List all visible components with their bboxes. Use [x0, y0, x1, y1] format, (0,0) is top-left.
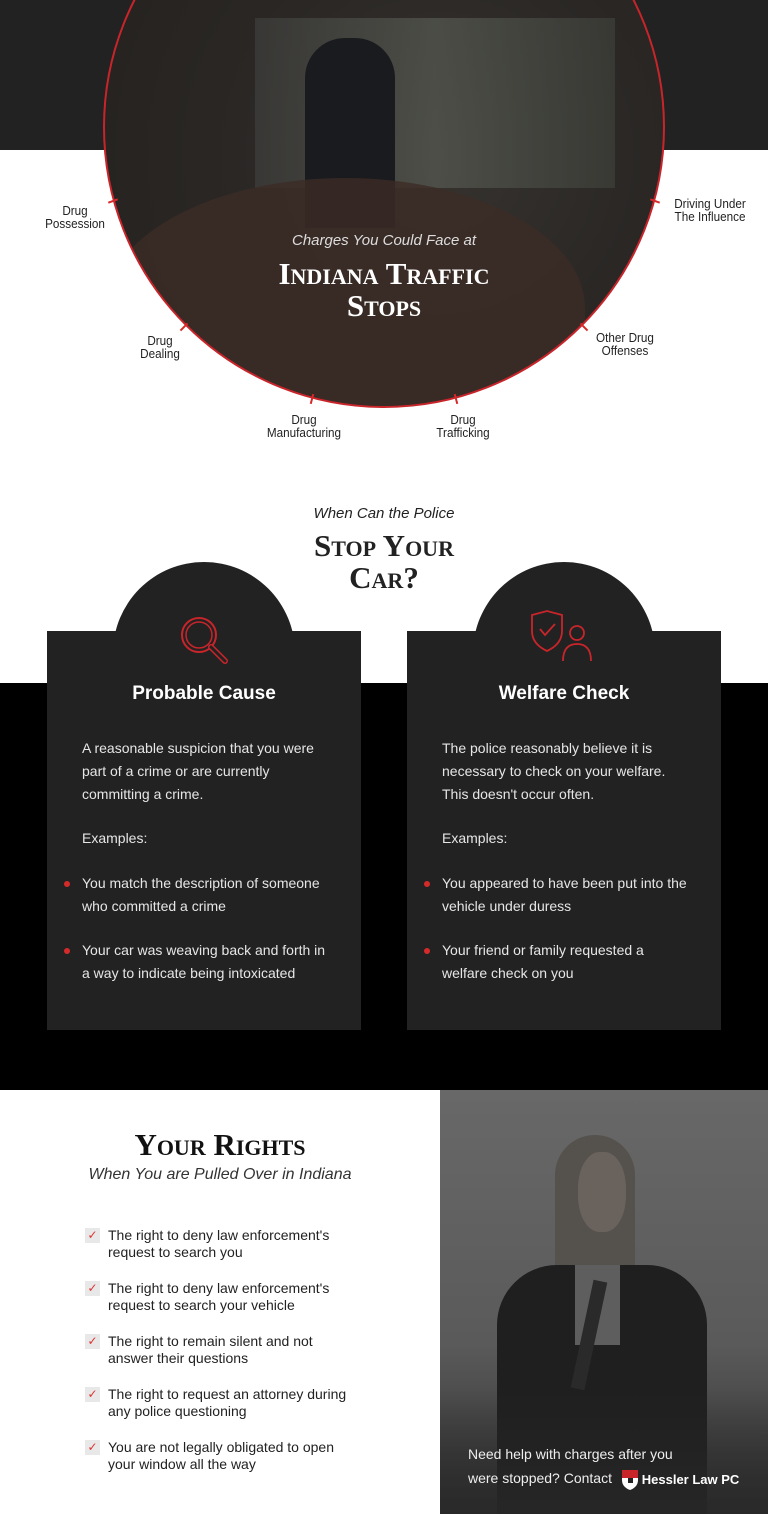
- hero title: Stops: [347, 288, 421, 323]
- card: welfare check: Examples:: [442, 830, 507, 846]
- rights list: ✓: [87, 1334, 98, 1348]
- charge labels: Driving Under: [674, 196, 746, 211]
- charge labels: Drug: [291, 412, 317, 427]
- logo: Hessler Law PC: [642, 1472, 739, 1487]
- section heading: when can police stop: [314, 505, 454, 595]
- attorney photo: [440, 1090, 768, 1514]
- rights list: The right to deny law enforcement's: [108, 1227, 329, 1243]
- card: welfare check: You appeared to have been put into the vehicle under duress: [442, 875, 687, 914]
- card: probable cause: A reasonable suspicion that you were part of a crime or are currently committing a crime.: [82, 740, 314, 802]
- rights heading: [88, 1127, 351, 1183]
- icon: shield person: [531, 610, 592, 661]
- section heading: when can police stop: Stop Your: [314, 528, 454, 563]
- card: probable cause: Examples:: [82, 830, 147, 846]
- logo: [622, 1470, 739, 1490]
- rights list: ✓: [87, 1387, 98, 1401]
- contact callout: Need help with charges after you: [468, 1446, 673, 1462]
- charge labels: Drug: [450, 412, 476, 427]
- icon: magnifier: [181, 617, 228, 664]
- rights list: request to search you: [108, 1244, 243, 1260]
- circle ticks: [108, 198, 660, 404]
- charge labels: Possession: [45, 216, 105, 231]
- section heading: when can police stop: Car?: [349, 560, 419, 595]
- hero title: [278, 232, 490, 323]
- charge labels: Trafficking: [436, 425, 490, 440]
- hero title: Charges You Could Face at: [292, 232, 476, 249]
- black band: [0, 683, 768, 1090]
- top dark band: [0, 0, 768, 150]
- charge labels: [45, 196, 746, 440]
- card: probable cause: Your car was weaving back and forth in a way to indicate being intoxicated: [82, 942, 325, 981]
- rights list: ✓: [87, 1228, 98, 1242]
- rights list: ✓: [87, 1281, 98, 1295]
- card: probable cause: You match the description of someone who committed a crime: [82, 875, 320, 914]
- card: welfare check: Your friend or family requested a welfare check on you: [442, 942, 644, 981]
- rights list: any police questioning: [108, 1403, 247, 1419]
- charge labels: Drug: [147, 333, 173, 348]
- charge labels: Dealing: [140, 346, 180, 361]
- rights list: You are not legally obligated to open: [108, 1439, 334, 1455]
- rights heading: Your Rights: [134, 1127, 306, 1162]
- rights list: request to search your vehicle: [108, 1297, 295, 1313]
- section heading: when can police stop: When Can the Police: [314, 505, 454, 522]
- rights list: ✓: [87, 1440, 98, 1454]
- contact callout: were stopped? Contact: [468, 1470, 612, 1486]
- rights heading: When You are Pulled Over in Indiana: [88, 1166, 351, 1183]
- card: welfare check: [407, 631, 721, 1030]
- hero title: Indiana Traffic: [278, 256, 490, 291]
- charge labels: Drug: [62, 203, 88, 218]
- card: welfare check: The police reasonably believe it is necessary to check on your welfare. This doesn't occur often.: [442, 740, 665, 802]
- card: probable cause: [47, 631, 361, 1030]
- rights list: [85, 1227, 346, 1472]
- rights list: The right to request an attorney during: [108, 1386, 346, 1402]
- rights list: answer their questions: [108, 1350, 248, 1366]
- charge labels: Manufacturing: [267, 425, 341, 440]
- rights list: The right to remain silent and not: [108, 1333, 313, 1349]
- charge labels: The Influence: [675, 209, 745, 224]
- charge labels: Offenses: [602, 343, 648, 358]
- hero circle photo: [103, 0, 665, 408]
- contact callout: [468, 1446, 739, 1490]
- rights list: The right to deny law enforcement's: [108, 1280, 329, 1296]
- card: welfare check: Welfare Check: [499, 683, 629, 704]
- charge labels: Other Drug: [596, 330, 654, 345]
- card: probable cause: Probable Cause: [132, 683, 276, 704]
- rights list: your window all the way: [108, 1456, 256, 1472]
